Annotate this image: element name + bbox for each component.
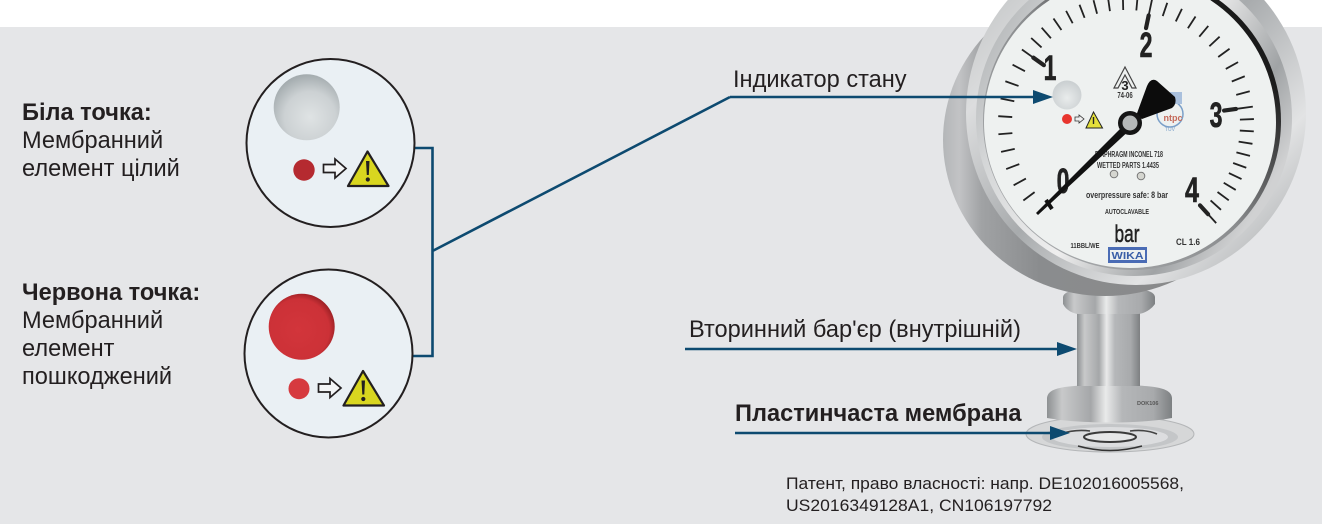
dial text block: bar [1115, 221, 1140, 248]
icon: warning triangle [344, 371, 384, 406]
gauge illustration [943, 0, 1306, 452]
text: red dot explanation: елемент [22, 336, 115, 362]
dial text block: AUTOCLAVABLE [1105, 209, 1149, 216]
dial blue approval logo [1157, 92, 1183, 133]
dial text block: WETTED PARTS 1.4435 [1097, 161, 1159, 170]
dial certification logo: 3 [1121, 78, 1129, 93]
dial certification logo: 74-06 [1117, 92, 1133, 100]
dial numerals [1044, 26, 1222, 210]
icon: outline arrow [324, 159, 346, 178]
process connection stem and clamp flange: DOK106 [1137, 401, 1158, 407]
dial tick marks [998, 0, 1254, 223]
text: red dot explanation: Мембранний [22, 308, 163, 334]
label: status indicator: Індикатор стану [733, 67, 907, 93]
dial screws [1110, 170, 1145, 180]
text: white dot explanation [22, 100, 180, 182]
gauge dial face [984, 0, 1276, 268]
arrow: to status indicator [730, 90, 1053, 104]
icon: warning triangle [348, 152, 388, 186]
dial text block: overpressure safe: 8 bar [1086, 190, 1168, 200]
dial text block: DIAPHRAGM INCONEL 718 [1095, 150, 1163, 159]
dial numerals: 1 [1044, 49, 1056, 88]
dial blue approval logo: ntpc [1164, 113, 1182, 123]
dial text block [1070, 150, 1200, 250]
text: red dot explanation: пошкоджений [22, 364, 172, 390]
WIKA logo [1108, 247, 1147, 263]
text: white dot explanation: елемент цілий [22, 156, 180, 182]
arrow: to plate diaphragm [735, 426, 1070, 440]
arrow: to secondary barrier [685, 342, 1077, 356]
dial numerals: 2 [1140, 26, 1152, 65]
dial numerals: 0 [1057, 162, 1069, 201]
dial red dot and warning [1062, 112, 1102, 128]
icon: grey indicator hole [274, 74, 340, 140]
label: plate diaphragm: Пластинчаста мембрана [735, 401, 1022, 427]
dial text block: CL 1.6 [1176, 237, 1200, 247]
patent note [786, 474, 1184, 515]
text: white dot explanation: Біла точка: [22, 100, 152, 126]
gauge needle [1036, 80, 1176, 215]
text: red dot explanation [22, 280, 200, 390]
dial blue approval logo: TÜV [1165, 126, 1176, 133]
text: red dot explanation: Червона точка: [22, 280, 200, 306]
text: white dot explanation: Мембранний [22, 128, 163, 154]
dial numerals: 3 [1210, 96, 1222, 135]
dial numerals: 4 [1185, 171, 1199, 210]
dial text block: 11BBL/WE [1070, 243, 1100, 250]
icon: outline arrow [318, 378, 341, 398]
gauge rear case [943, 0, 1267, 296]
bracket connector [413, 97, 730, 356]
patent note: US2016349128A1, CN106197792 [786, 496, 1052, 515]
panel: white dot magnified circle [246, 59, 414, 227]
icon: red indicator hole [269, 294, 335, 360]
patent note: Патент, право власності: напр. DE102016005568, [786, 474, 1184, 493]
icon: small dark red dot [293, 159, 315, 181]
WIKA logo: WIKA [1112, 251, 1144, 262]
dial indicator window [1052, 80, 1082, 110]
gauge bezel [966, 0, 1306, 285]
icon: small red dot [288, 378, 310, 399]
label: secondary barrier: Вторинний бар'єр (внутрішній) [689, 317, 1021, 343]
dial certification logo [1114, 67, 1136, 100]
panel: red dot magnified circle [244, 270, 412, 438]
process connection stem and clamp flange [1026, 288, 1194, 452]
